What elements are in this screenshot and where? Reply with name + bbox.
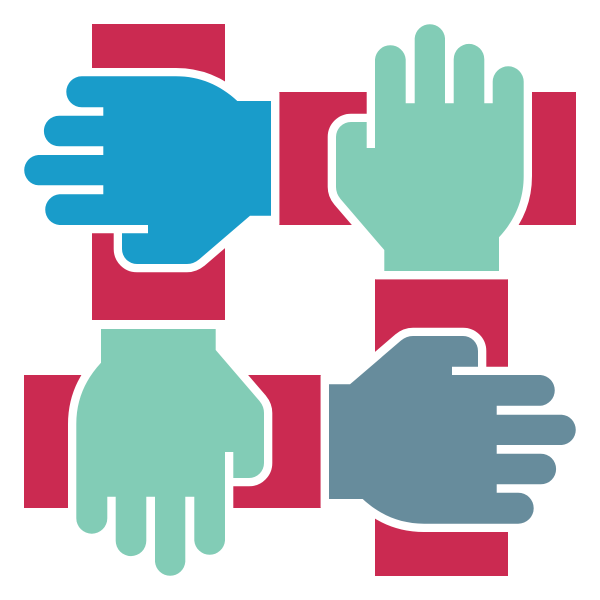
hand: bottom-right slate [329, 336, 576, 524]
arm: bottom-left crimson bar [24, 375, 321, 508]
hand: bottom-left teal [76, 329, 264, 576]
hand: top-left blue [24, 76, 271, 264]
hand: top-right teal [336, 24, 524, 271]
arm: top-right crimson bar [279, 92, 576, 225]
arm: top-left crimson bar [92, 24, 225, 320]
arm: bottom-right crimson bar [375, 279, 508, 576]
